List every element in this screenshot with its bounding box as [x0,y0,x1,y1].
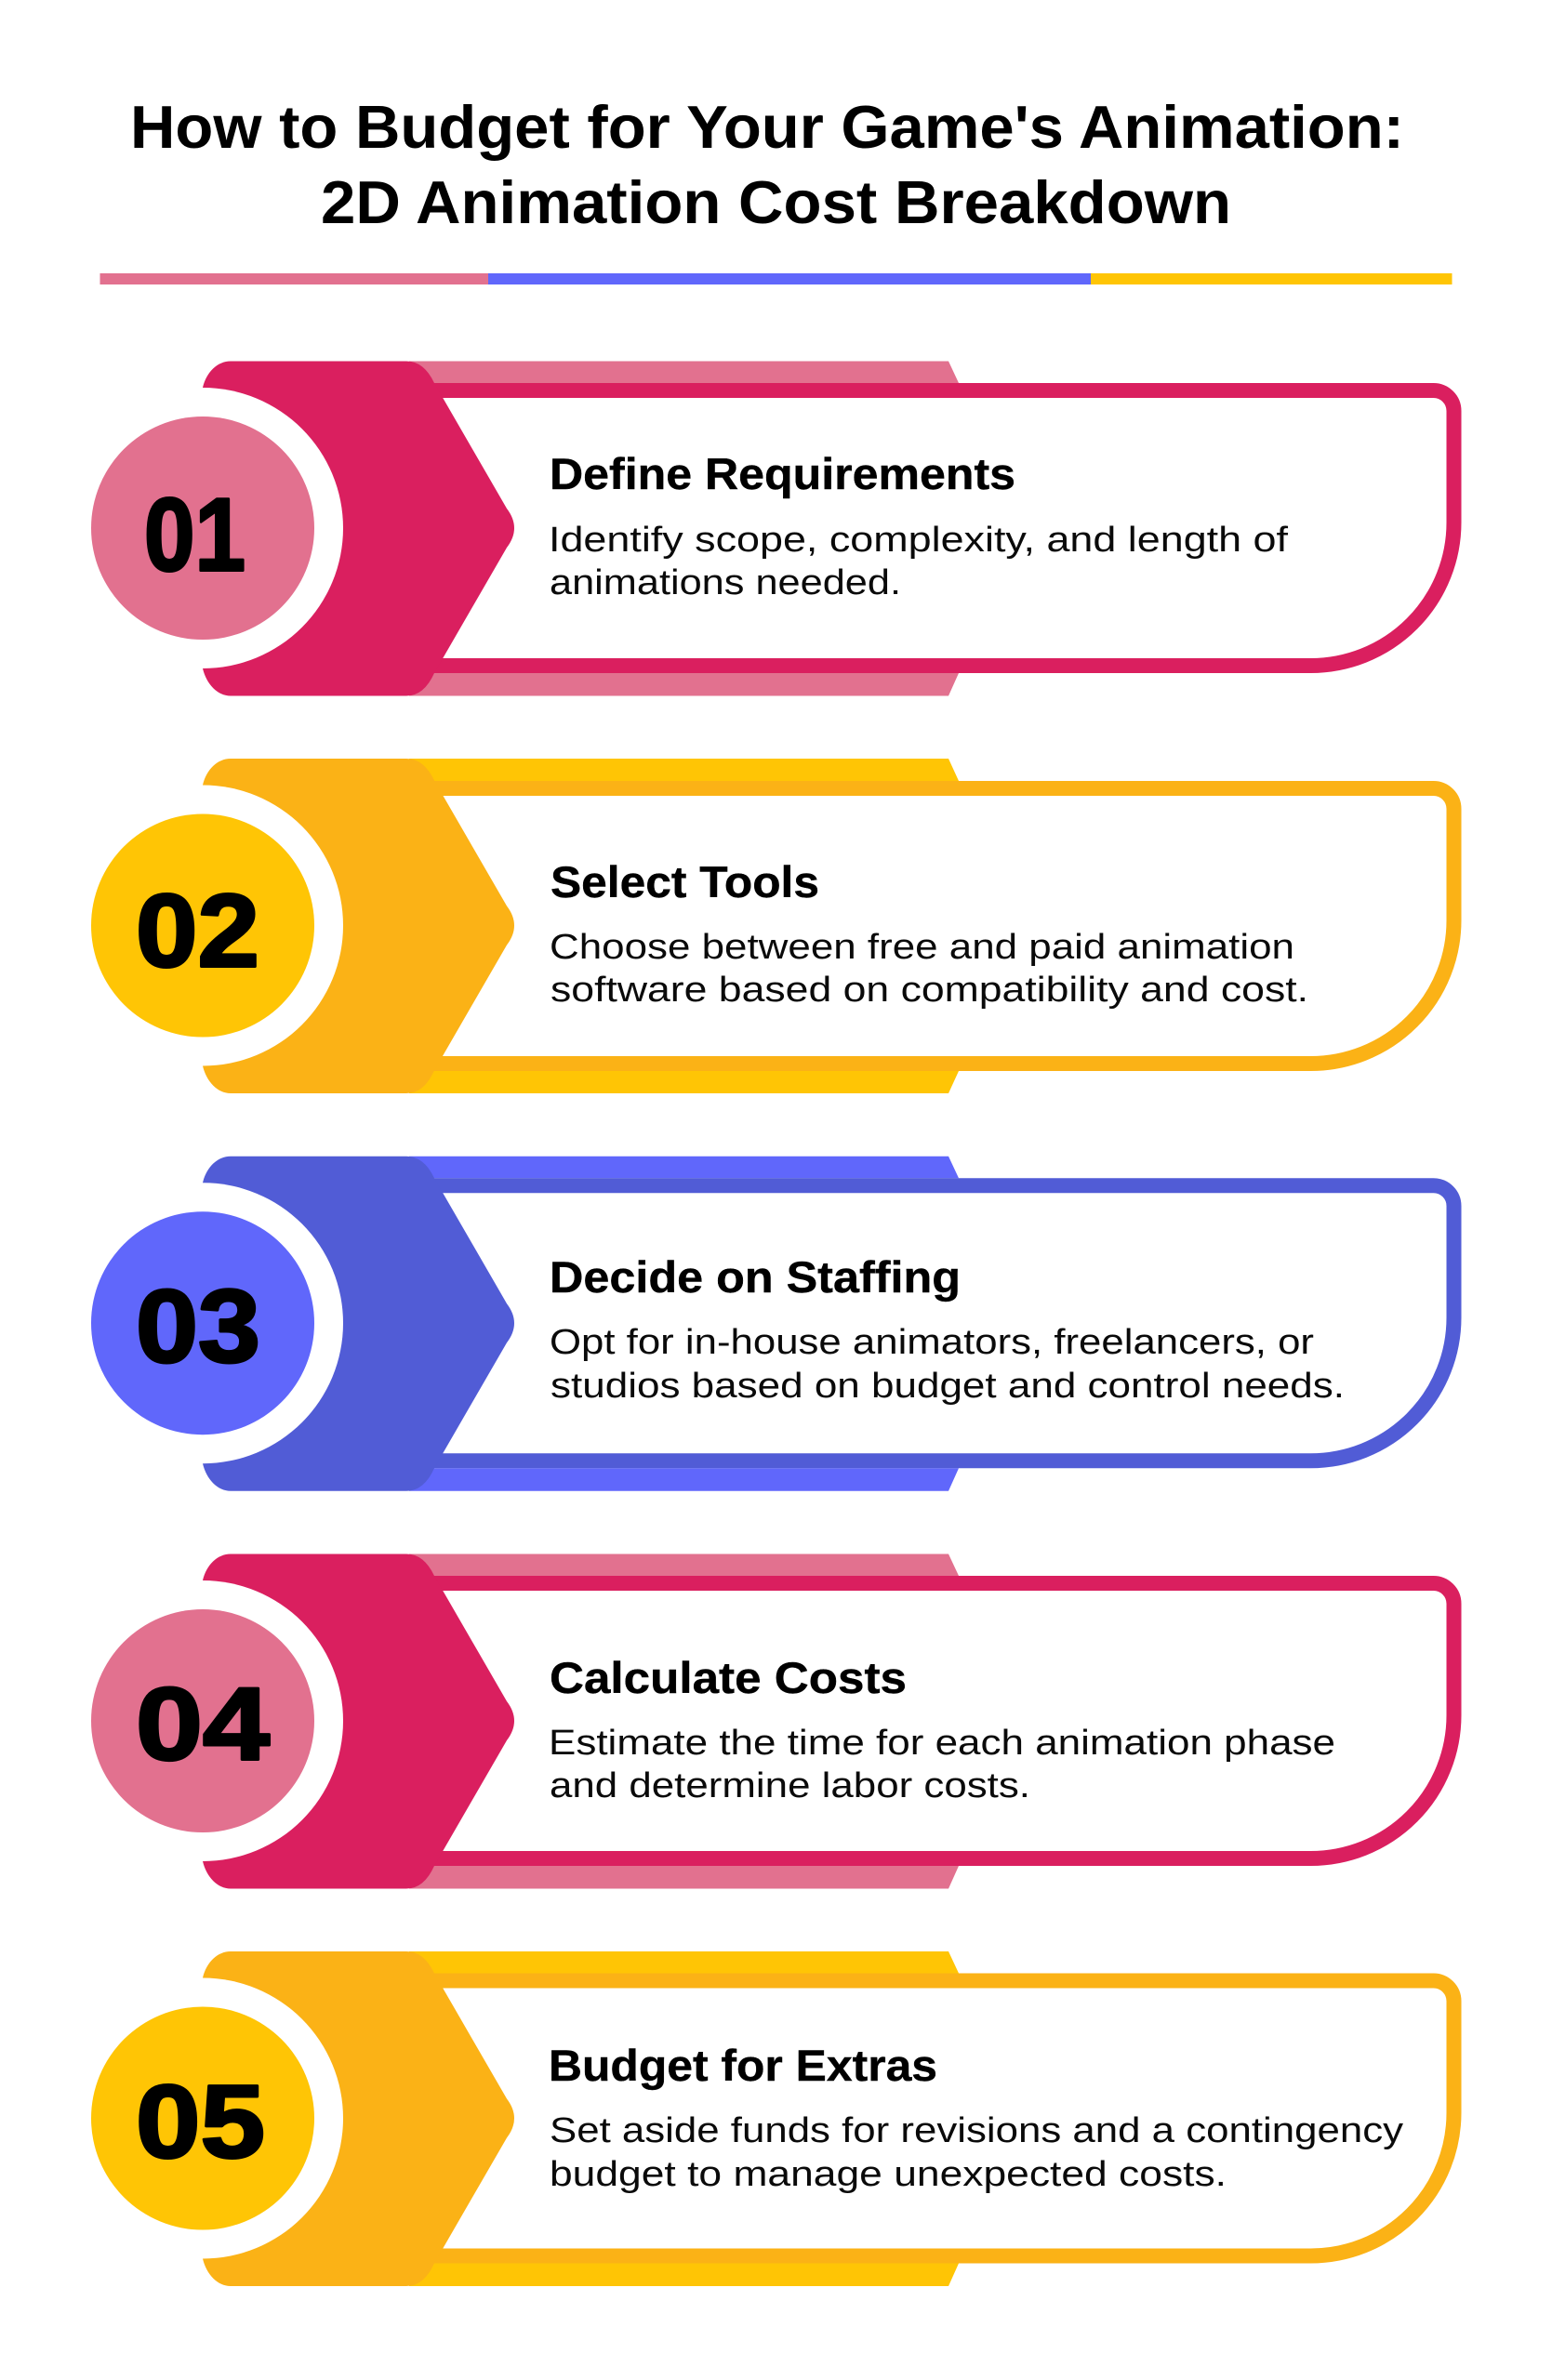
step description [550,928,1308,1010]
title [130,93,1404,236]
step description [549,521,1289,602]
back bands [409,1157,959,1491]
step description: animations needed. [550,563,901,602]
back bands [409,361,959,695]
step description: Estimate the time for each animation phase [549,1724,1335,1763]
chevron [203,1554,514,1889]
panel: step 01 define requirements [62,361,1454,695]
step description [550,1323,1345,1406]
chevron [203,1951,514,2286]
step heading: Calculate Costs [550,1653,907,1702]
step description: Opt for in-house animators, freelancers, or [550,1323,1314,1362]
white ring cut-out [62,785,343,1065]
number badge: 05 [136,2064,265,2179]
step heading: Budget for Extras [549,2041,937,2090]
panel: step 03 decide on staffing [62,1157,1454,1491]
step heading: Define Requirements [550,449,1015,498]
title: 2D Animation Cost Breakdown [321,168,1231,236]
step description: software based on compatibility and cost. [550,971,1308,1010]
number badge [91,2006,314,2229]
step description: budget to manage unexpected costs. [550,2155,1227,2194]
step description [550,2111,1403,2194]
tricolour divider under title [100,273,1453,284]
back bands [409,1554,959,1889]
number badge: 01 [144,478,245,593]
number badge [91,1211,314,1435]
step heading: Decide on Staffing [550,1252,961,1302]
panel: step 05 budget for extras [62,1951,1454,2286]
chevron [203,361,514,695]
white ring cut-out [62,388,343,668]
panel: step 04 calculate costs [62,1554,1454,1889]
step description: studios based on budget and control needs. [550,1367,1345,1406]
number badge [91,416,314,640]
chevron [203,1157,514,1491]
step description: Set aside funds for revisions and a contingency [550,2111,1403,2150]
step description: Identify scope, complexity, and length of [549,521,1289,560]
step description: Choose between free and paid animation [550,928,1294,967]
number badge [91,1609,314,1832]
title: How to Budget for Your Game's Animation: [130,93,1404,161]
number badge: 04 [136,1666,270,1781]
white ring cut-out [62,1580,343,1861]
number badge: 03 [136,1269,260,1384]
step description: and determine labor costs. [550,1766,1030,1805]
card outline [409,390,1454,666]
card outline [409,788,1454,1064]
back bands [409,1951,959,2286]
card outline [409,1185,1454,1461]
card outline [409,1583,1454,1858]
number badge: 02 [136,874,259,989]
panel: step 02 select tools [62,759,1454,1093]
white ring cut-out [62,1978,343,2259]
step heading: Select Tools [550,857,819,906]
back bands [409,759,959,1093]
step description [549,1724,1335,1805]
chevron [203,759,514,1093]
white ring cut-out [62,1183,343,1463]
number badge [91,814,314,1038]
card outline [409,1980,1454,2255]
